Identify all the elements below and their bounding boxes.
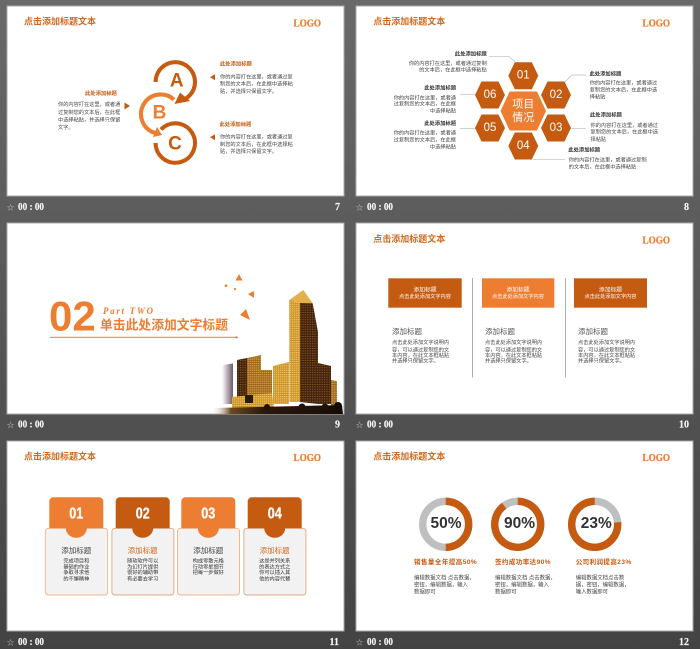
text block 05: 中选择粘贴 [430,142,456,150]
text block 03: 复制您的文本后，在此框中选 [590,128,658,136]
card 02: 添加标题 [128,545,158,555]
card 03: 添加标题 [193,545,224,555]
card 03: 03 [201,506,215,522]
icon: ring C [156,123,195,163]
column text 2: 点击此处添加文字说明内 [485,338,542,346]
footer: ☆ [6,421,15,431]
title: 点击添加标题文本 [373,233,445,244]
text block 06: 过复制您的文本后，在此框 [394,100,456,108]
text block: A description: 制您的文本后，在此框中选择粘 [220,80,293,88]
card 01: 01 [69,506,83,522]
column text 3: 点击此处添加文字说明内 [578,338,635,346]
card 01: 争取寻求他 [63,568,89,576]
stat text 2 [495,557,556,595]
text block 05: 过复制您的文本后，在此框 [394,135,456,143]
card 04: 04 [268,506,282,522]
text block 02 [590,69,657,100]
text block: B description: 你的内容打在这里，或者通 [58,100,121,108]
text block: C description: 你的内容打在这里，或者通过复 [220,132,293,140]
text block 01: 你的内容打在这里，或者通过复制 [409,59,487,67]
donut chart 90% [495,501,541,547]
leader lines [460,57,586,159]
card 03 [178,497,240,595]
footer [6,637,339,648]
icon: ring A with arrow: A [170,70,184,92]
column text 2 [485,326,543,365]
card 04: 他的内容代替 [259,574,290,582]
footer: ☆ [6,204,15,214]
text block: C description: 贴，并选择只保留文字。 [220,147,277,155]
card 02 [112,497,174,595]
stat text 2: 签约成功率达90% [495,557,551,566]
card 04 [244,497,306,595]
panel: slide 12 donut stats [356,441,693,648]
center hexagon: 项目 [512,98,534,110]
text block 04 [568,146,647,171]
footer: 00 : 00 [18,637,44,648]
header box 3: 添加标题 [599,285,622,293]
text block: A description: 你的内容打在这里，或者通过复 [220,72,293,80]
center hexagon [500,91,547,131]
card 03: 把每一步做好 [193,568,224,576]
text block: A description [210,60,293,95]
text block 03: 择粘贴 [590,135,606,143]
donut chart 23%: 23% [581,515,612,532]
text block: C description: 制您的文本后，在此框中选择粘 [220,140,293,148]
column text 2: 并选择只保留文字。 [485,357,532,365]
section title: 单击此处添加文字标题 [100,318,228,332]
donut chart 23% [572,501,618,547]
column text 1: 本内容，在此文本框粘贴 [392,351,449,359]
stat text 3: 据，密钮，编辑数据， [576,580,630,588]
title: 点击添加标题文本 [24,16,96,27]
stat text 2: 数据即可 [495,587,517,595]
panel: slide 9 section divider [6,223,344,431]
header box 1 [388,278,462,308]
footer [356,637,689,648]
stat text 2: 密钮，编辑数据，输入 [495,580,550,588]
text block 02: 你的内容打在这里，或者通过 [590,78,657,86]
card 04: 你可以插入其 [259,568,290,576]
column text 1: 点击此处添加文字说明内 [392,338,449,346]
footer: 00 : 00 [367,202,393,213]
footer: 7 [335,202,340,213]
column text 3: 本内容，在此文本框粘贴 [578,351,635,359]
panel: slide 11 four cards [6,441,344,648]
column text 3: 并选择只保留文字。 [578,357,625,365]
text block 04: 的文本后，在此框中选择粘贴 [569,163,636,171]
part label: Part TWO [103,306,154,316]
footer: ☆ [356,421,364,431]
text block 02: 择粘贴 [590,92,605,100]
center hexagon: 情况 [512,111,534,124]
icon: floating triangles [225,274,254,320]
logo: LOGO [642,17,670,29]
footer [356,420,689,431]
text block 05 [394,119,457,150]
hexagon 06: 06 [484,89,496,101]
text block 02: 此处添加标题 [590,69,622,77]
footer: 00 : 00 [367,420,393,430]
footer: 8 [684,202,689,213]
hexagon 02: 02 [550,89,562,101]
column text 3: 添加标题 [578,326,608,336]
stat text 3: 编辑数据文档点击数 [576,573,625,581]
text block: A description: 此处添加标题 [220,60,252,68]
hexagon 03 [541,114,571,142]
header box 2: 添加标题 [506,285,530,293]
column text 1 [392,326,450,365]
card 01 [45,497,108,595]
stat text 1: 密钮，编辑数据，输入 [414,580,469,588]
header box 1: 点击此处添加文字内容 [399,292,451,300]
stat text 1: 销售量全年提高50% [414,557,477,566]
text block 06: 中选择粘贴 [430,107,456,115]
illustration: city buildings [211,290,343,414]
icon: ring C: C [168,134,182,154]
card 01: 基础的作业 [63,562,89,570]
text block 05: 你的内容打在这里，或者通 [394,128,457,136]
card 02: 很好的辅助带 [127,568,158,576]
hexagon 01 [508,62,538,89]
hexagon 06 [475,82,505,108]
panel: slide 8 hexagon project overview [356,6,693,214]
logo: LOGO [294,17,321,29]
section number: 02 [49,292,96,340]
footer: 9 [335,420,340,430]
column text 1: 添加标题 [392,326,422,336]
text block 04: 你的内容打在这里，或者通过复制 [569,156,647,164]
icon: ring A with arrow [156,62,195,104]
stat text 3: 公司利润提高23% [576,557,631,566]
text block: C description [210,120,293,155]
card 03: 构成零散元格 [193,557,225,565]
card 01: 完成项目和 [63,557,89,565]
footer: 00 : 00 [18,202,44,213]
text block: B description [58,89,130,131]
column text 3 [578,326,636,365]
hexagon 05 [475,114,505,142]
card 02: 02 [136,506,150,522]
footer: 12 [679,637,689,648]
text block 02: 复制您的文本后，在此框中选 [590,85,657,93]
card 02: 为幻灯片提供 [127,562,158,570]
header box 2 [482,278,554,308]
footer: ☆ [356,638,364,648]
panel: slide 10 three columns [356,223,693,431]
title: 点击添加标题文本 [373,451,445,462]
text block: B description: 过复制您的文本后，在此框 [58,108,120,116]
text block 01 [409,50,487,74]
header box 3 [574,278,647,308]
header box 1: 添加标题 [413,285,437,293]
footer: 00 : 00 [367,637,393,648]
donut chart 90%: 90% [504,515,535,532]
column text 3: 容，可以通过复制您的文 [578,345,636,353]
text block 06: 此处添加标题 [424,84,457,92]
icon: ring B with arrow: B [153,102,166,124]
text block: B description: 文字。 [58,123,74,131]
text block 03 [590,111,658,143]
donut chart 50% [423,501,469,547]
text block 06: 你的内容打在这里，或者通 [394,93,457,101]
card 04: 的表达方式之 [259,562,290,570]
stat text 1 [414,557,477,595]
donut chart 50%: 50% [430,515,462,532]
header box 3: 点击此处添加文字内容 [585,292,636,300]
stat text 1: 编辑数据文档 点击数据， [414,573,475,581]
column text 2: 容，可以通过复制您的文 [485,345,543,353]
text block: C description: 此处添加标题 [220,120,252,128]
card 04: 这是并列关系 [259,557,290,565]
text block 01: 的文本后，在此框中选择粘贴 [419,66,487,74]
logo: LOGO [642,452,670,464]
hexagon 03: 03 [550,122,562,134]
stat text 3 [576,557,631,595]
hexagon 02 [541,82,571,108]
icon: ring B with arrow [141,94,174,137]
card 01: 的不懈精神 [63,574,89,582]
card 01: 添加标题 [61,545,92,555]
footer: 10 [679,420,689,430]
card 02: 有必要去学习 [127,574,158,582]
logo: LOGO [294,452,321,464]
title: 点击添加标题文本 [373,16,445,27]
column text 1: 容，可以通过复制您的文 [392,345,450,353]
text block 06 [394,84,457,115]
text block: B description: 中选择粘贴，并选择只保留 [58,116,120,124]
footer: ☆ [356,204,364,214]
card 03: 行动零星细节 [193,562,224,570]
logo: LOGO [642,235,670,247]
text block 01: 此处添加标题 [455,50,487,58]
footer: ☆ [6,638,15,648]
hexagon 01: 01 [517,70,530,82]
card 04: 添加标题 [260,545,290,555]
underline [50,336,238,339]
text block 03: 此处添加标题 [590,111,622,119]
header box 2: 点击此处添加文字内容 [492,292,544,300]
stat text 3: 输入数据即可 [576,587,609,595]
stat text 2: 编辑数据文档 点击数据， [495,573,556,581]
column text 2: 本内容，在此文本框粘贴 [485,351,542,359]
hexagon 05: 05 [484,122,496,134]
footer [6,202,340,214]
footer [6,420,340,431]
text block: A description: 贴，并选择只保留文字。 [220,87,277,95]
footer: 11 [330,637,339,648]
hexagon 04 [508,132,538,160]
card 02: 随软软件可以 [127,557,158,565]
text block 03: 你的内容打在这里，或者通过 [590,121,658,129]
footer [356,202,689,214]
column text 1: 并选择只保留文字。 [392,357,439,365]
title: 点击添加标题文本 [24,451,96,462]
text block 05: 此处添加标题 [424,119,457,127]
text block: B description: 此处添加标题 [85,89,117,97]
column text 2: 添加标题 [485,326,515,336]
stat text 1: 数据即可 [414,587,436,595]
panel: slide 7 three-step cycle [6,6,344,214]
text block 04: 此处添加标题 [568,146,601,154]
hexagon 04: 04 [517,140,530,152]
footer: 00 : 00 [18,420,44,430]
